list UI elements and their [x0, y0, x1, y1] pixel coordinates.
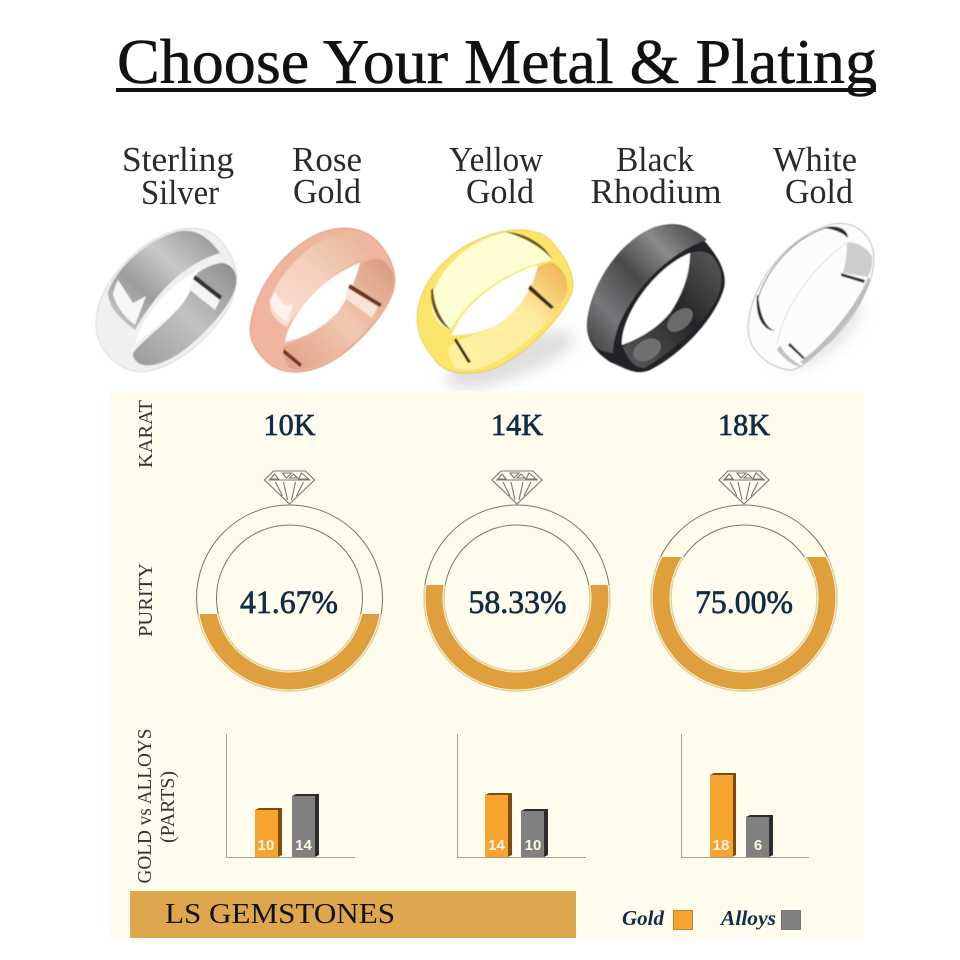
metal label: Yellow Gold: Gold: [466, 172, 534, 211]
purity ring: 14K: 58.33%: [468, 585, 566, 621]
metal label: White Gold: White: [773, 140, 857, 179]
icon: white gold ring: [748, 223, 874, 382]
metal label: Black Rhodium: Black: [616, 140, 694, 179]
side label: karat: KARAT: [135, 400, 157, 468]
purity ring: 18K: 75.00%: [695, 585, 793, 621]
metal label: Yellow Gold: Yellow: [449, 140, 544, 179]
metal label: Rose Gold: Gold: [293, 172, 361, 211]
metal label: Sterling Silver: Sterling: [122, 140, 234, 179]
icon: rose gold ring: [250, 228, 395, 372]
legend: [622, 906, 800, 930]
metal label: Rose Gold: [292, 140, 362, 211]
metal label: Yellow Gold: [449, 140, 544, 211]
bar chart: 14K: 14: [488, 837, 505, 854]
karat heading: 18K: 18K: [718, 407, 771, 442]
bar chart: 10K: [226, 734, 355, 858]
side label: purity: PURITY: [135, 563, 157, 637]
bar chart: 18K: 6: [754, 837, 762, 854]
icon: diamond 10K: [264, 471, 314, 504]
icon: sterling silver ring: [96, 228, 236, 372]
metal label: Sterling Silver: Silver: [141, 173, 219, 212]
side label: gold vs alloys parts: (PARTS): [157, 771, 179, 843]
bar chart: 18K: [682, 734, 809, 858]
banner: LS GEMSTONES: [130, 891, 576, 938]
karat heading: 14K: 14K: [491, 407, 544, 442]
side label: gold vs alloys parts: [134, 728, 179, 884]
legend: Gold: [622, 906, 664, 930]
purity ring: 10K: 41.67%: [240, 585, 338, 621]
metal label: White Gold: [773, 140, 857, 211]
metal label: Black Rhodium: Rhodium: [590, 172, 722, 211]
metal label: Black Rhodium: [590, 140, 722, 211]
panel: karat comparison: [110, 391, 864, 938]
banner: LS GEMSTONES: LS GEMSTONES: [165, 899, 395, 930]
purity ring: 14K: [424, 505, 610, 691]
bar chart: 10K: 10: [258, 837, 274, 854]
bar chart: 14K: [458, 734, 586, 858]
karat heading: 10K: 10K: [264, 407, 316, 442]
metal label: Sterling Silver: [122, 140, 234, 212]
bar chart: 10K: 14: [295, 837, 312, 854]
icon: diamond 18K: [719, 471, 769, 504]
purity ring: 10K: [196, 505, 382, 691]
bar chart: 14K: 10: [525, 837, 541, 854]
metal label: Rose Gold: Rose: [292, 140, 362, 179]
legend: Alloys: [719, 906, 776, 930]
icon: diamond 14K: [492, 471, 542, 504]
icon: black rhodium ring: [587, 224, 725, 372]
bar chart: 18K: 18: [713, 837, 729, 854]
side label: gold vs alloys parts: GOLD vs ALLOYS: [134, 728, 156, 884]
purity ring: 18K: [651, 505, 837, 691]
title: Choose Your Metal & Plating: [117, 27, 877, 97]
metal label: White Gold: Gold: [785, 172, 853, 211]
icon: yellow gold ring: [417, 230, 580, 400]
